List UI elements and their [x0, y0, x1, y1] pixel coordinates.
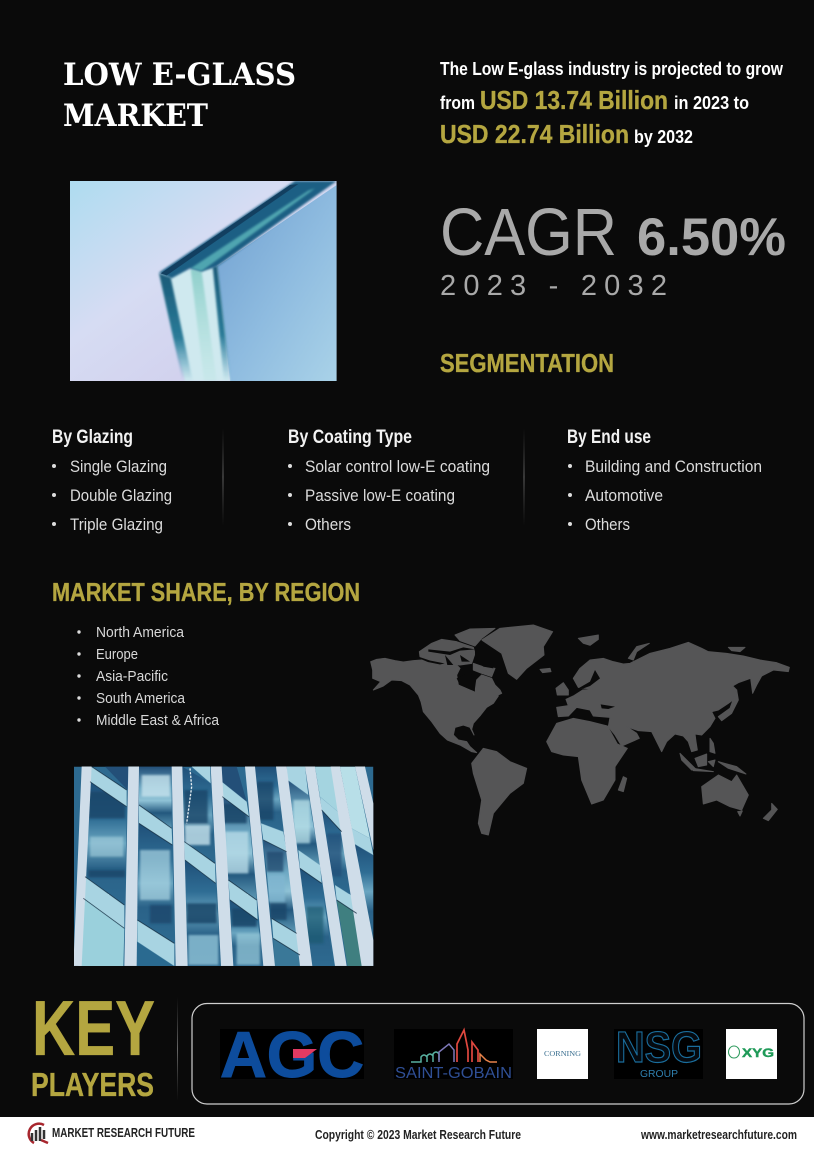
region list: Middle East & Africa: [96, 712, 220, 729]
footer bar: Copyright © 2023 Market Research Future: [315, 1128, 521, 1142]
logo: XYG: XYG: [742, 1046, 774, 1060]
footer bar: MARKET RESEARCH FUTURE: [52, 1126, 195, 1140]
logo: NSG Group: NSG: [616, 1023, 702, 1072]
segment: by glazing: [52, 427, 172, 534]
segment: by glazing: By Glazing: [52, 427, 133, 448]
CAGR value: 2023 - 2032: [440, 270, 667, 302]
CAGR value: [440, 195, 786, 302]
segment: by coating type: [288, 427, 490, 534]
segment: by coating type: Solar control low-E coating: [305, 457, 490, 476]
photo: laminated glass corner: [70, 181, 337, 381]
market forecast statement: by 2032: [634, 127, 693, 147]
region list: North America: [96, 624, 185, 641]
segment: by coating type: Passive low-E coating: [305, 486, 455, 505]
market forecast statement: USD 13.74 Billion: [480, 85, 668, 115]
panes: [78, 767, 373, 966]
heading: segmentation: SEGMENTATION: [440, 348, 614, 378]
logo: Corning: [537, 1029, 588, 1079]
segment: by end use: Building and Construction: [585, 457, 762, 476]
footer bar: [0, 1117, 814, 1150]
title: LOW E-GLASS: [63, 57, 296, 93]
segment: by end use: Others: [585, 515, 630, 534]
segment: by glazing: Triple Glazing: [70, 515, 163, 534]
heading: key players: KEY: [32, 984, 155, 1072]
region list: Europe: [96, 646, 138, 663]
logo: Saint-Gobain: SAINT-GOBAIN: [395, 1065, 512, 1082]
panel: key player logos: [192, 1004, 804, 1104]
region list: [77, 624, 220, 729]
segment: by end use: [567, 427, 762, 534]
world map: [371, 625, 789, 835]
region list: Asia-Pacific: [96, 668, 168, 685]
region list: South America: [96, 690, 186, 707]
segment: by coating type: Others: [305, 515, 351, 534]
market forecast statement: USD 22.74 Billion: [440, 119, 629, 149]
segment: by glazing: Single Glazing: [70, 457, 167, 476]
heading: key players: [31, 984, 155, 1103]
logo: NSG Group: GROUP: [640, 1068, 678, 1080]
segment: by end use: Automotive: [585, 486, 663, 505]
segment: by end use: By End use: [567, 427, 651, 448]
logo: Corning: CORNING: [544, 1049, 582, 1058]
icon: market research future logo: [29, 1124, 48, 1143]
segment: by glazing: Double Glazing: [70, 486, 172, 505]
CAGR value: 6.50%: [637, 208, 786, 267]
logo: Saint-Gobain: [394, 1029, 513, 1082]
market forecast statement: [440, 59, 784, 149]
logo: AGC: AGC: [220, 1018, 364, 1091]
title: MARKET: [63, 98, 208, 134]
segment: by coating type: By Coating Type: [288, 427, 412, 448]
photo: glass facade: [73, 767, 373, 966]
heading: key players: PLAYERS: [31, 1066, 154, 1103]
glass reflections: [88, 775, 342, 965]
CAGR value: CAGR: [440, 195, 617, 270]
heading: market share by region: MARKET SHARE, BY REGION: [52, 577, 360, 607]
title: [63, 57, 296, 134]
market forecast statement: from: [440, 93, 475, 113]
logo: XYG: [726, 1029, 777, 1079]
market forecast statement: in 2023 to: [674, 93, 749, 113]
